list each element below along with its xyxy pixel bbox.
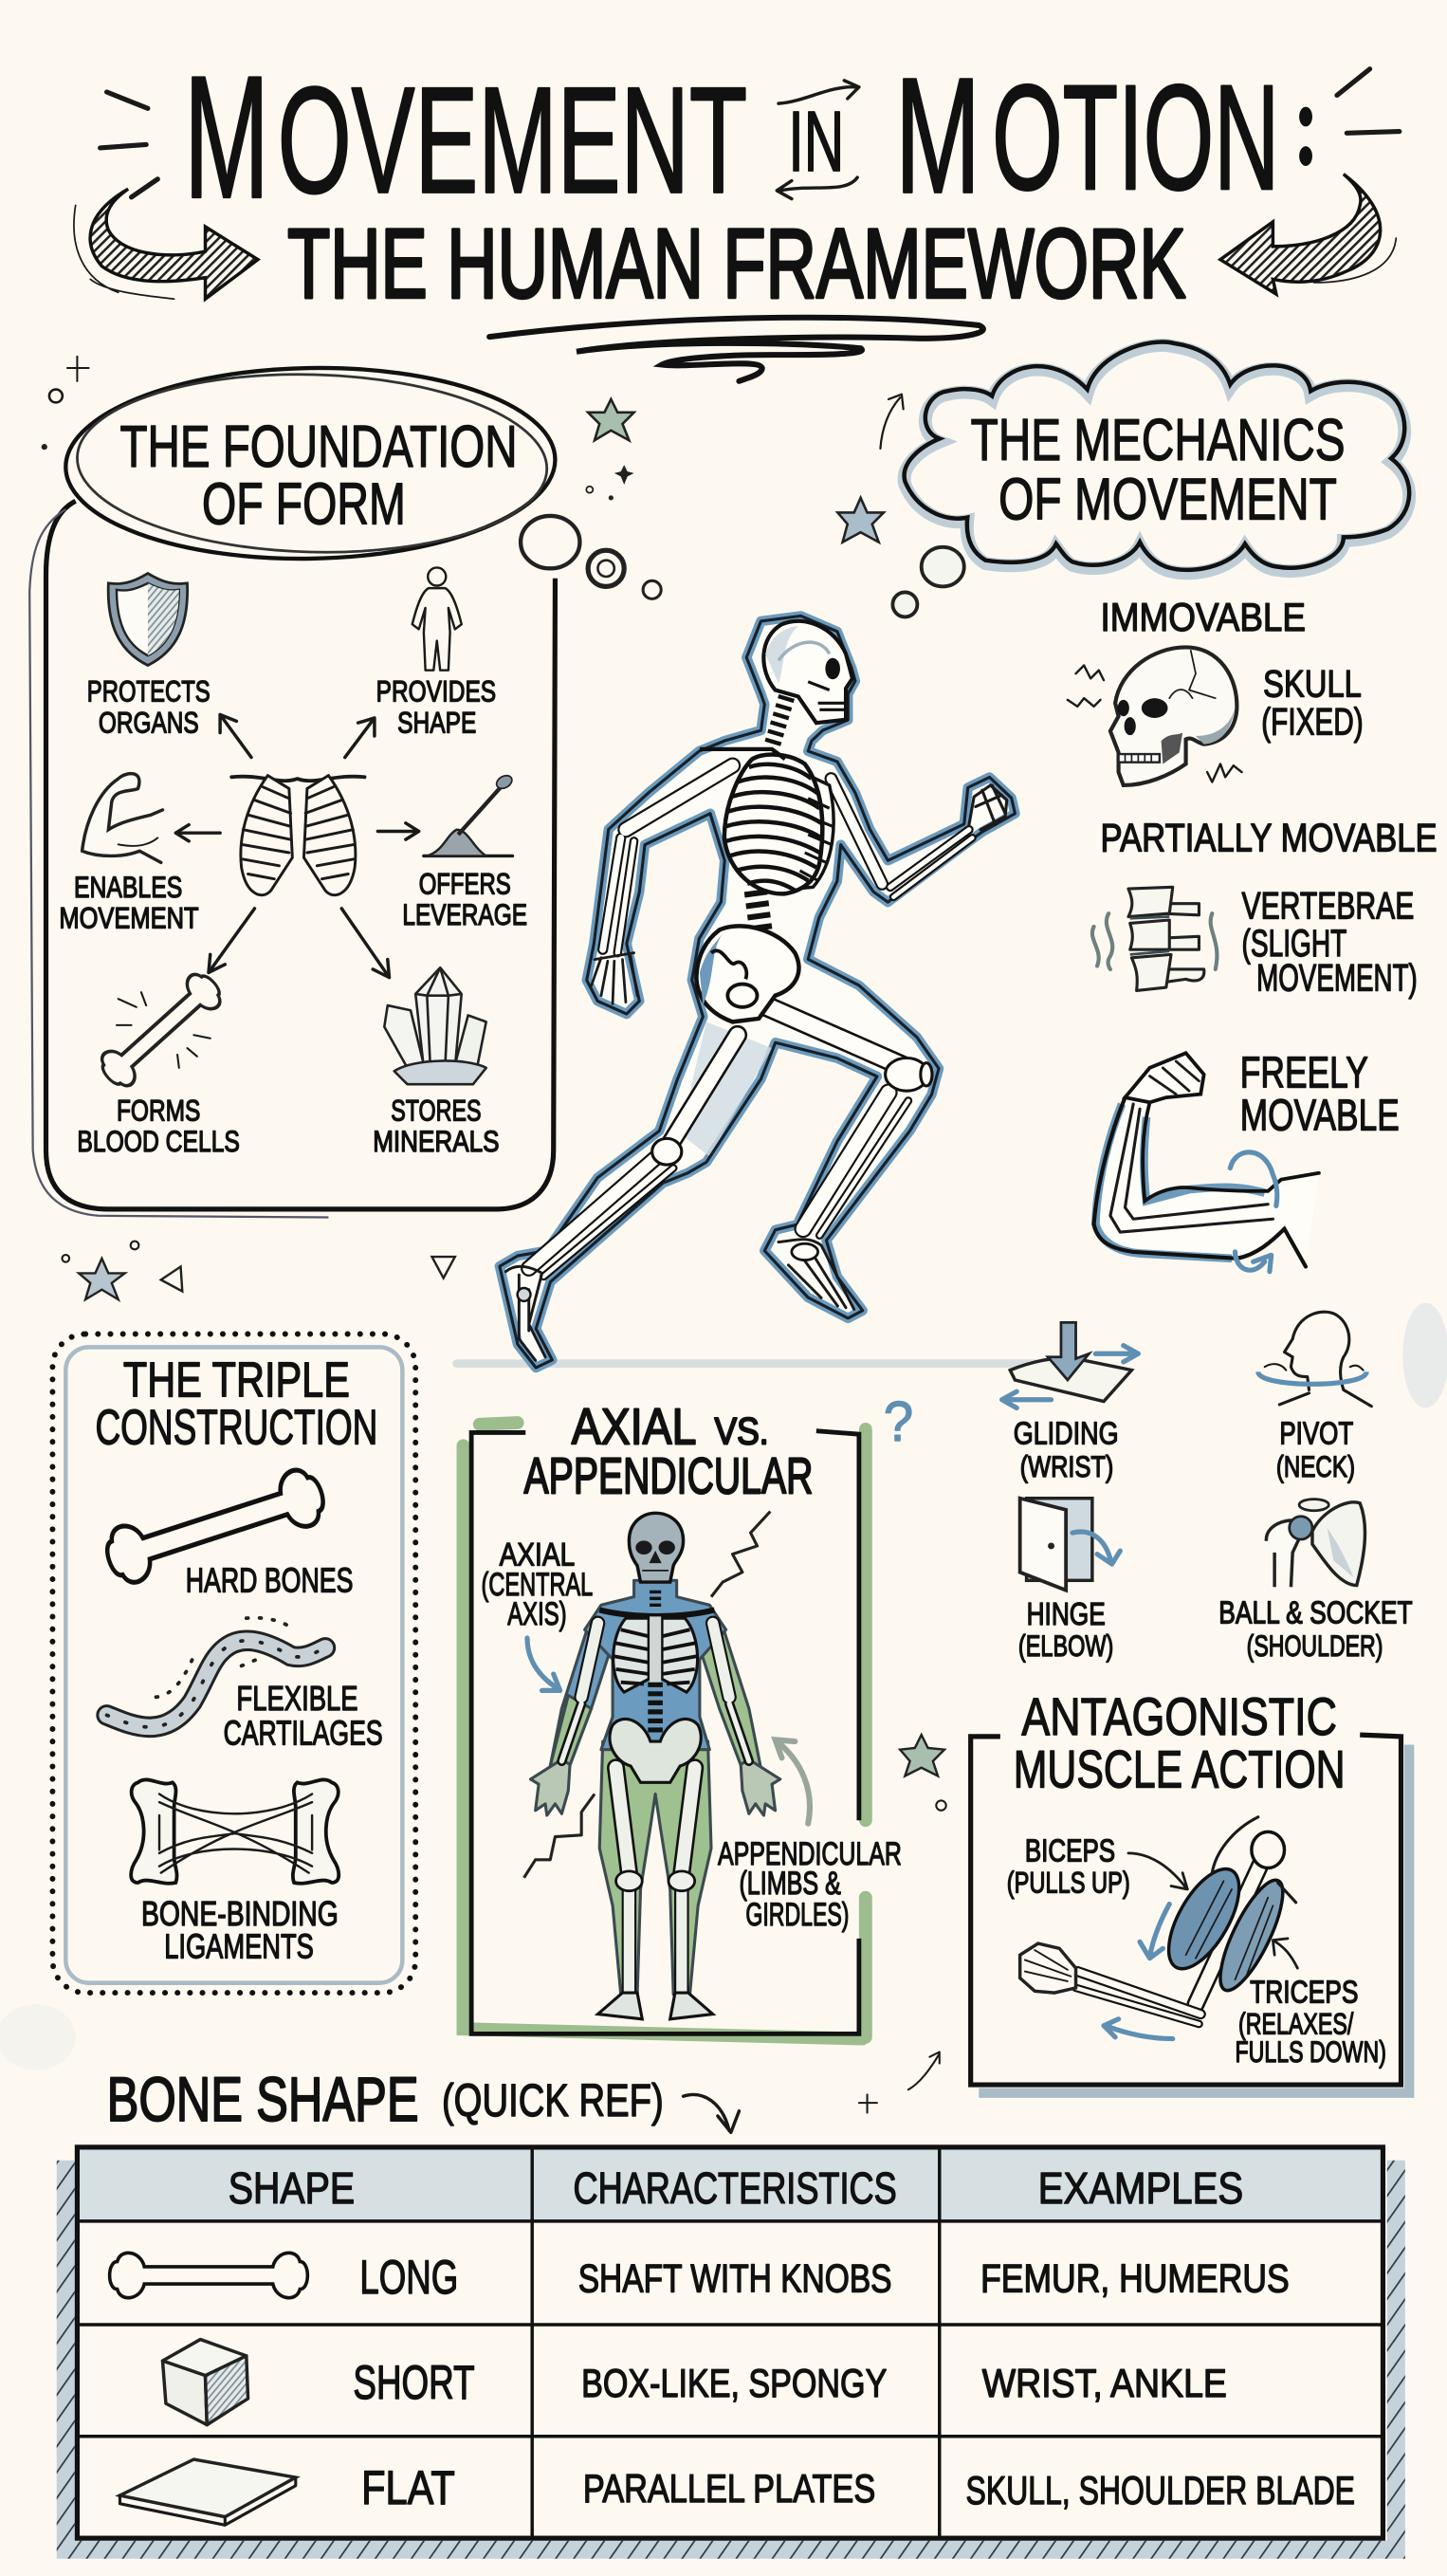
front fist	[969, 785, 1007, 830]
label: protects organs: ORGANS	[99, 707, 199, 740]
doodles near antagonistic panel	[859, 1735, 946, 2113]
table header row: CHARACTERISTICS	[574, 2163, 897, 2213]
heading: the foundation of form: OF FORM	[202, 472, 406, 538]
label: triceps: TRICEPS	[1250, 1974, 1358, 2009]
joint: hinge: (ELBOW)	[1018, 1629, 1113, 1663]
thought bubbles right	[892, 547, 964, 616]
thought bubbles left	[521, 516, 661, 598]
label: skull fixed: (FIXED)	[1261, 701, 1364, 743]
doodles mid left	[62, 1242, 455, 1299]
heading: the foundation of form	[64, 364, 557, 562]
ribcage	[700, 749, 833, 893]
decorative doodles top	[42, 357, 904, 543]
label: vertebrae: (SLIGHT	[1241, 923, 1346, 965]
table header row: EXAMPLES	[1038, 2163, 1243, 2213]
label: stores minerals: MINERALS	[373, 1125, 500, 1158]
joint: hinge: HINGE	[1027, 1596, 1106, 1631]
row: long	[110, 2251, 1290, 2304]
label: offers leverage	[402, 867, 527, 931]
heading cloud: the mechanics of movement: THE MECHANICS	[971, 408, 1346, 473]
joint: gliding: GLIDING	[1014, 1416, 1119, 1451]
heading: ANTAGONISTIC	[1021, 1687, 1337, 1746]
front foot	[778, 1240, 854, 1310]
icon: person	[412, 567, 462, 671]
title	[74, 40, 1400, 381]
label: provides shape: SHAPE	[397, 707, 476, 740]
label	[224, 1679, 383, 1753]
table: bone shape	[65, 2147, 1396, 2549]
icon: vertebrae	[1092, 887, 1217, 990]
label	[141, 1894, 339, 1966]
knee joints	[652, 1058, 932, 1165]
icon: flexed muscle	[82, 774, 162, 862]
label: axial central axis: (CENTRAL	[482, 1567, 593, 1603]
limb bones	[529, 765, 972, 1277]
skull	[763, 621, 852, 723]
label: forms blood cells	[77, 1094, 240, 1158]
arrows from ribcage	[175, 714, 419, 978]
row: long: LONG	[359, 2251, 458, 2304]
label: axial central axis: AXIS)	[507, 1596, 567, 1632]
icon: cartilage	[107, 1618, 325, 1727]
panel: antagonistic muscle action	[971, 1687, 1409, 2093]
row: short: SHORT	[353, 2356, 475, 2409]
icon: lever	[424, 773, 514, 856]
panel: the foundation of form	[29, 364, 557, 1218]
heading: VS.	[714, 1411, 769, 1453]
joint: gliding: (WRIST)	[1020, 1450, 1113, 1483]
lightning marks	[524, 1512, 770, 1878]
table header row	[229, 2163, 1243, 2213]
heading: the foundation of form: THE FOUNDATION	[119, 414, 518, 480]
clavicle	[599, 1610, 714, 1616]
arrow: to axial	[527, 1638, 560, 1690]
frontal skeleton	[530, 1513, 780, 2019]
body silhouette	[530, 1580, 780, 1995]
title accent rays	[101, 69, 1400, 197]
panel: axial vs appendicular	[463, 1399, 902, 2039]
label: stores minerals: STORES	[391, 1094, 482, 1127]
row: long: FEMUR, HUMERUS	[980, 2255, 1290, 2300]
skull	[629, 1513, 684, 1582]
joint: gliding	[1002, 1322, 1138, 1483]
icon: crystals	[384, 967, 486, 1084]
title line 1: M	[895, 44, 980, 228]
heading: THE TRIPLE	[123, 1352, 350, 1408]
icon: skull	[1068, 647, 1241, 785]
joint: pivot	[1258, 1312, 1371, 1483]
icon: hard bone	[101, 1464, 330, 1588]
right curved arrow	[1220, 175, 1396, 294]
arrow	[684, 2094, 739, 2132]
spine	[756, 696, 787, 940]
label: enables movement: ENABLES	[74, 871, 182, 904]
icon: arm with muscles	[1020, 1817, 1297, 2039]
label: provides shape	[376, 675, 496, 740]
heading: bone shape quick ref: (QUICK REF)	[442, 2075, 664, 2126]
joint: pivot: PIVOT	[1279, 1416, 1353, 1451]
title line 1: IN	[788, 94, 844, 190]
label: LIGAMENTS	[164, 1927, 314, 1966]
row: flat	[119, 2459, 1355, 2525]
joint: hinge	[1018, 1499, 1120, 1663]
label: provides shape: PROVIDES	[376, 675, 496, 708]
thorax	[613, 1591, 698, 1733]
label: skull fixed	[1261, 663, 1364, 743]
label: biceps: BICEPS	[1025, 1833, 1115, 1868]
label: axial central axis: AXIAL	[500, 1537, 575, 1573]
section: freely movable joint	[1094, 1048, 1400, 1272]
back hand	[592, 953, 637, 1003]
label: offers leverage: OFFERS	[419, 867, 511, 900]
label: forms blood cells: FORMS	[117, 1094, 200, 1127]
arrow: to appendicular	[776, 1739, 810, 1824]
section: freely movable joint: FREELY	[1240, 1048, 1368, 1097]
icon: ribcage	[231, 776, 365, 895]
joint: ball and socket	[1218, 1500, 1413, 1663]
label: appendicular limbs and girdles: (LIMBS &	[739, 1866, 841, 1902]
label: appendicular limbs and girdles: GIRDLES)	[745, 1897, 850, 1933]
title line 1: M	[184, 40, 269, 234]
label: protects organs	[87, 675, 211, 740]
heading cloud: the mechanics of movement	[905, 342, 1409, 573]
label: biceps	[1007, 1833, 1130, 1899]
label: offers leverage: LEVERAGE	[402, 898, 527, 931]
label: HARD BONES	[186, 1560, 353, 1599]
icon: bone with rays	[95, 967, 228, 1093]
table header row: SHAPE	[229, 2163, 355, 2213]
label: appendicular limbs and girdles	[718, 1836, 902, 1933]
joint: ball and socket: (SHOULDER)	[1247, 1629, 1383, 1663]
label: forms blood cells: BLOOD CELLS	[77, 1125, 240, 1158]
label: triceps: (RELAXES/	[1238, 2007, 1354, 2040]
back foot	[505, 1266, 545, 1360]
heading: APPENDICULAR	[524, 1448, 813, 1505]
central running skeleton	[457, 616, 1052, 1368]
title underline swoosh	[489, 318, 983, 381]
heading	[524, 1399, 813, 1505]
joint: pivot: (NECK)	[1276, 1450, 1355, 1483]
feet	[597, 1993, 713, 2019]
heading: bone shape quick ref	[107, 2064, 739, 2134]
label: CARTILAGES	[224, 1714, 383, 1753]
label: triceps	[1236, 1974, 1386, 2069]
label: vertebrae	[1241, 885, 1418, 999]
row: flat: PARALLEL PLATES	[583, 2466, 875, 2511]
heading	[95, 1352, 377, 1456]
row: short	[162, 2340, 1227, 2425]
table header fill	[77, 2149, 1382, 2221]
label: axial central axis	[482, 1537, 593, 1632]
icon: ligaments	[131, 1779, 339, 1884]
label: biceps: (PULLS UP)	[1007, 1866, 1130, 1899]
pelvis	[696, 926, 798, 1021]
label: appendicular limbs and girdles: APPENDICULAR	[718, 1836, 902, 1872]
heading: bone shape quick ref: BONE SHAPE	[107, 2064, 419, 2134]
label: enables movement: MOVEMENT	[59, 902, 199, 935]
label: BONE-BINDING	[141, 1894, 339, 1933]
row: short: BOX-LIKE, SPONGY	[581, 2361, 887, 2405]
label: FLEXIBLE	[236, 1679, 358, 1718]
heading: MUSCLE ACTION	[1014, 1740, 1346, 1799]
label: enables movement	[59, 871, 199, 935]
title line 1: OVEMENT	[278, 56, 747, 225]
icon: shield	[108, 574, 188, 666]
icon: bent arm	[1094, 1053, 1319, 1272]
row: long: SHAFT WITH KNOBS	[578, 2255, 892, 2300]
pelvis	[610, 1719, 701, 1782]
label: skull fixed: SKULL	[1263, 663, 1362, 705]
label: protects organs: PROTECTS	[87, 675, 211, 708]
row: flat: FLAT	[361, 2461, 455, 2514]
heading: AXIAL	[572, 1399, 696, 1456]
section: immovable joint	[1068, 595, 1364, 785]
bones	[561, 1623, 749, 1991]
section: partially movable joint	[1092, 815, 1438, 999]
section: immovable joint: IMMOVABLE	[1101, 595, 1306, 639]
panel: the triple construction	[52, 1334, 415, 1993]
heading: CONSTRUCTION	[95, 1401, 377, 1456]
label: triceps: FULLS DOWN)	[1236, 2035, 1386, 2069]
label: stores minerals	[373, 1094, 500, 1158]
ground shadow	[457, 1361, 1052, 1366]
title line 1	[184, 40, 1312, 234]
heading cloud: the mechanics of movement: OF MOVEMENT	[998, 467, 1337, 532]
heading	[1014, 1687, 1346, 1799]
section: freely movable joint: MOVABLE	[1240, 1091, 1400, 1140]
icon: question mark: ?	[884, 1391, 913, 1453]
row: short: WRIST, ANKLE	[982, 2361, 1227, 2405]
left curved arrow	[74, 189, 258, 299]
body outline	[500, 616, 1015, 1368]
